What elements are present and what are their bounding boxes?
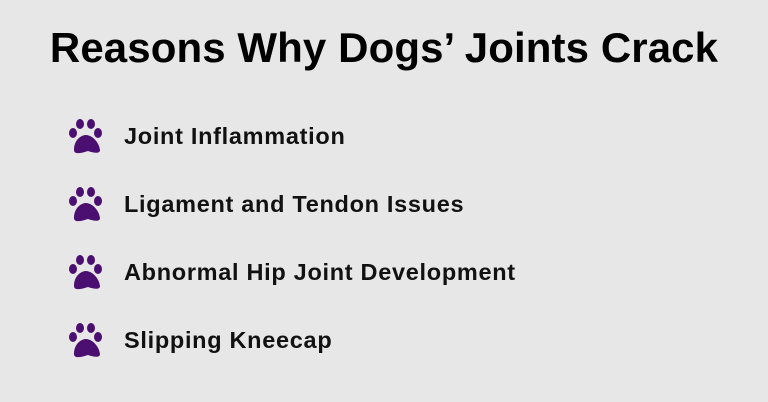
icon: paw (69, 323, 102, 358)
item: ligament (69, 187, 464, 222)
icon: paw (69, 119, 102, 154)
item: joint inflammation: Joint Inflammation (124, 123, 346, 149)
item: ligament: Ligament and Tendon Issues (124, 191, 464, 217)
title: Reasons Why Dogs’ Joints Crack (50, 24, 718, 71)
item: joint inflammation (69, 119, 346, 154)
icon: paw (69, 255, 102, 290)
item: hip: Abnormal Hip Joint Development (124, 259, 516, 285)
icon: paw (69, 187, 102, 222)
item: hip (69, 255, 516, 290)
item: kneecap: Slipping Kneecap (124, 327, 332, 353)
item: kneecap (69, 323, 332, 358)
